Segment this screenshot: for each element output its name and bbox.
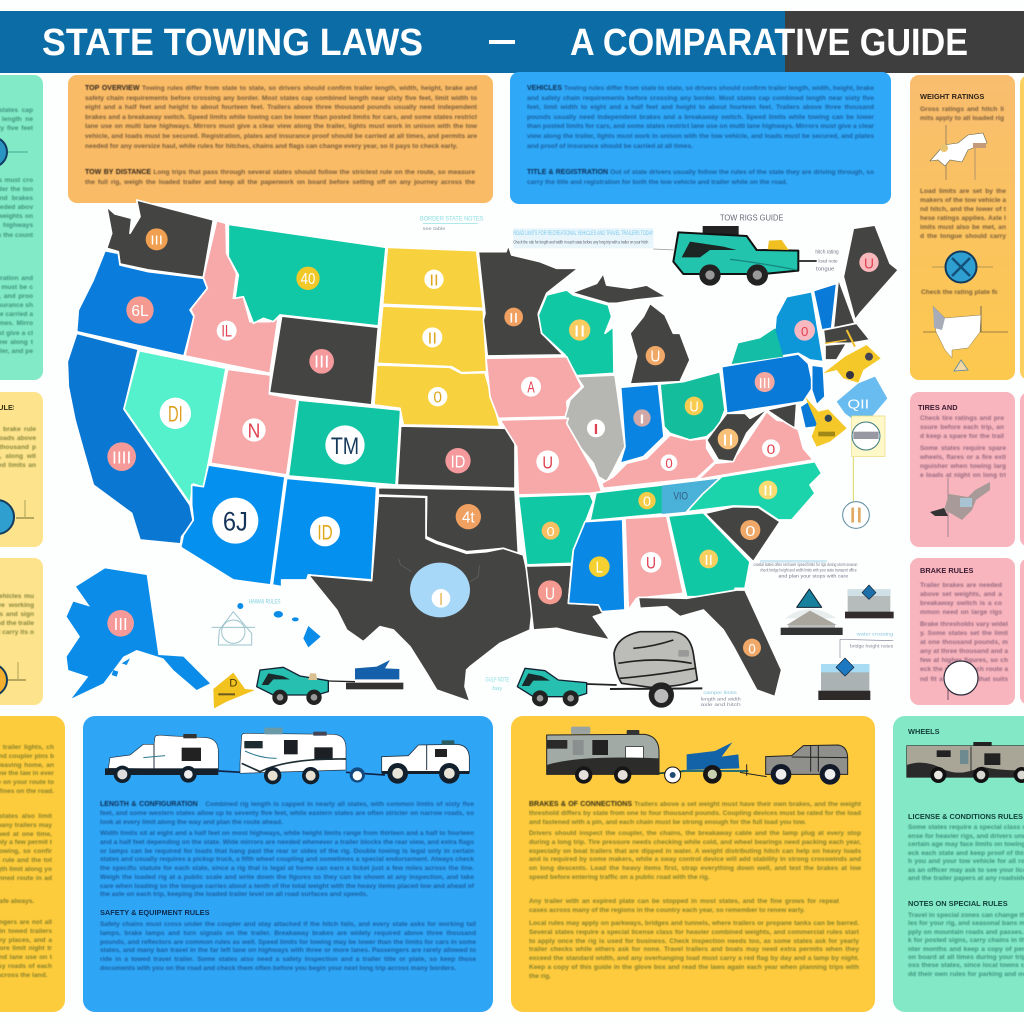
state: Utah <box>211 369 297 475</box>
state: Alabama: U <box>646 554 656 573</box>
state: Minnesota <box>478 245 578 356</box>
state: Connecticut <box>825 343 847 360</box>
state: Louisiana <box>526 565 610 640</box>
state: Virginia: 0 <box>767 441 776 457</box>
icon: white circle <box>943 660 979 700</box>
caption: camper note: axle and hitch <box>701 702 742 707</box>
icon: house badge <box>212 612 255 645</box>
title: STATE TOWING LAWS <box>42 22 423 64</box>
text block: overview: TOP OVERVIEW Towing rules differ from state to state, so drivers should confirm trailer length, width, height, brake and safety chain requirements before crossing any border. Most states cap combined length near sixty five feet, limit width to eight and a half feet and height to about fourteen feet. Trailers above three thousand pounds usually need independent brakes and a breakaway switch. Speed limits while towing can be lower than posted limits for cars, and some states restrict lane use on multi lane highways. Mirrors must give a clear view along the trailer, lights must work in unison with the tow vehicle, and loads must be secured. Registration, plates and insurance proof should be carried at all times, and permits are needed for any oversize haul, while rules for hitches, chains and flags can change every year, so it pays to check early. <box>85 85 477 150</box>
icon: white trailer hitch diagram <box>923 306 1008 372</box>
illustration: white truck camper, trailer and pickup <box>105 728 470 784</box>
state: Maryland and Delaware <box>767 400 818 428</box>
panel: bottom green <box>893 716 1024 1012</box>
icon: yellow callout signs upper <box>823 330 881 383</box>
state: Georgia: II <box>704 553 713 569</box>
state: Massachusetts <box>823 323 870 343</box>
illustration: teal RV top <box>673 226 817 286</box>
state: Indiana: I <box>639 411 645 426</box>
state: Hawaii <box>237 603 321 647</box>
icon: blue globe badge <box>932 250 993 284</box>
caption: camper note: length and width <box>701 697 741 702</box>
caption: west label: see table <box>423 226 446 231</box>
text block: blue second: TITLE & REGISTRATION Out of state drivers usually follow the rules of the state they are driving through, so carry the title and registration for both the tow vehicle and trailer while on the road. <box>527 169 874 186</box>
state: Oregon <box>77 251 207 356</box>
caption: Gulf label <box>485 678 509 692</box>
state: Iowa: A <box>527 380 535 397</box>
illustration: grey motorhome <box>906 742 1024 783</box>
state: Colorado <box>288 400 401 485</box>
text block: blue overview: VEHICLES Towing rules differ from state to state, so drivers should confirm trailer length, width, height, brake and safety chain requirements before crossing any border. Most states cap combined length near sixty five feet, limit width to eight and a half feet and height to about fourteen feet. Trailers above three thousand pounds usually need independent brakes and a breakaway switch. Speed limits while towing can be lower than posted limits for cars, and some states restrict lane use on multi lane highways. Mirrors must give a clear view along the trailer, lights must work in unison with the tow vehicle, and loads must be secured, and plates and proof of insurance should be carried at all times. <box>527 85 874 150</box>
state: North Dakota: II <box>429 272 439 289</box>
icon: yellow warning sign: D <box>229 678 237 690</box>
heading: WEIGHT RATINGS <box>920 92 984 101</box>
caption: RV left note: ROAD LIMITS FOR RECREATIONAL VEHICLES AND TRAVEL TRAILERS TODAY <box>513 230 654 237</box>
icon: highlighted seal with leader <box>843 416 885 528</box>
caption: drop note: bridge height notes <box>850 643 893 648</box>
icon: yellow callout signs lower <box>805 397 847 447</box>
panel: top blue overview <box>510 72 891 204</box>
state: Florida: 0 <box>748 640 756 656</box>
state: Washington: III <box>150 232 163 247</box>
text block: first section: LENGTH & CONFIGURATION Combined rig length is capped in nearly all states, with common limits of sixty five feet, and some western states allow up to seventy five feet, while eastern states are often stricter on narrow roads, so look at every limit along the way and plan the route ahead. <box>100 801 474 826</box>
state: Nevada <box>124 351 226 503</box>
state: South Carolina <box>705 507 780 562</box>
state: Wisconsin: II <box>574 323 586 340</box>
state: Wyoming <box>269 316 378 405</box>
state: Missouri: U <box>542 453 553 473</box>
heading: WHEELS <box>908 727 940 736</box>
state: Texas: I <box>439 589 443 609</box>
state: Alaska <box>67 568 210 698</box>
state: South Carolina: 0 <box>745 524 755 540</box>
state: Texas <box>308 496 533 702</box>
panel: right edge pink sliver lower <box>1020 558 1024 705</box>
state: Kentucky <box>602 435 715 488</box>
panel: bottom blue <box>83 716 493 1012</box>
icon: highlighted seal with leader: ll <box>849 506 863 528</box>
icon: blue gauge with stand <box>0 499 34 535</box>
caption: southeast note: check bridge height and width limits with your state transport office <box>760 568 857 573</box>
state: Oregon: 6L <box>131 303 149 320</box>
icon: water drop building <box>818 639 893 700</box>
caption: RV right note <box>815 249 839 273</box>
state: Arkansas <box>518 494 593 565</box>
state: Ohio <box>660 372 725 440</box>
state: Missouri <box>500 418 602 495</box>
state: Kentucky: 0 <box>665 455 673 471</box>
icon: light blue diamond: QII <box>847 397 869 411</box>
caption: camper note <box>701 690 742 707</box>
illustration: teal car with blue trailer <box>257 660 403 705</box>
heading: NOTES ON SPECIAL RULES <box>908 899 1008 908</box>
state: California: IIII <box>112 447 131 467</box>
state: West Virginia <box>707 408 768 462</box>
caption: RV right note: tongue <box>816 267 834 273</box>
map: western states <box>67 200 533 708</box>
panel: top orange overview <box>68 75 493 203</box>
state: Michigan upper <box>572 273 667 303</box>
state: Mississippi: L <box>596 560 603 577</box>
header banner <box>0 11 1024 73</box>
state: Nebraska: 0 <box>433 390 442 407</box>
state: New York <box>732 292 823 364</box>
panel: right pink upper <box>910 392 1015 547</box>
state: Wisconsin <box>538 290 614 376</box>
state: West Virginia: II <box>722 432 734 449</box>
text block: third paragraph: Any trailer with an expired plate can be stopped in most states, and the fine grows for repeat cases across many of the regions in the country each year, so remember to renew early. <box>529 898 839 914</box>
caption: RV right note: hitch rating <box>815 249 839 255</box>
caption: southeast note: coastal states often set lower speed limits for rigs during storm season <box>753 562 858 567</box>
icon: yellow warning sign <box>213 673 255 708</box>
text block: second paragraph: Width limits sit at eight and a half feet on most highways, while height limits range from thirteen and a half to fourteen and a half feet depending on the state. Wide mirrors are needed whenever a trailer blocks the rear view, and extra flags or lamps can be required for loads that hang past the rear or sides of the rig. Double towing is legal only in certain states and usually requires a pickup truck, a fifth wheel coupling and sometimes a special endorsement. Always check the specific statute for each state, since a rig that is legal at home can earn a ticket just a few miles across the line. Weigh the loaded rig at a public scale and write down the figures so they can be shown at any inspection, and take care when loading so the tongue carries about a tenth of the total weight with the heavy items placed low and ahead of the axle on each trip, keeping the loaded trailer level on all road surfaces and speeds. <box>100 830 474 898</box>
caption: west label <box>420 216 483 231</box>
text block: third paragraph: Safety chains must cross under the coupler and stay attached if the hitch fails, and every state asks for working tail lamps, brake lamps and turn signals on the trailer. Breakaway brakes are widely required above three thousand pounds, and reflectors are common rules as well. Speed limits for towing may be lower than the limits for cars in some states, and many ban travel in the far left lane on highways with three or more lanes. Passengers are rarely allowed to ride in a towed travel trailer. Some states also need a safety inspection and a trailer title or plate, so keep those documents with you on the road and check them often before you begin your next long trip across many borders. <box>100 921 476 972</box>
state: North Dakota <box>383 247 483 308</box>
caption: RV right note: load note <box>818 259 838 264</box>
state: Ohio: U <box>689 400 699 416</box>
panel: right edge pink sliver upper <box>1020 392 1024 547</box>
caption: camper note: camper limits <box>703 690 737 696</box>
state: Georgia <box>668 513 750 597</box>
illustration: teal car towing grey camper <box>517 632 702 708</box>
state: Oklahoma: 4t <box>462 510 475 527</box>
title: A COMPARATIVE GUIDE <box>570 22 968 64</box>
heading: LICENSE & CONDITIONS RULES <box>908 812 1023 821</box>
text block: first section: BRAKES & OF CONNECTIONS Trailers above a set weight must have their own brakes, and the weight threshold differs by state from one to four thousand pounds. Coupling devices must be rated for the load and fastened with a pin, and each chain must be strong enough for the full load you tow. <box>529 801 861 826</box>
state: Minnesota: II <box>509 310 518 326</box>
state: Kansas: ID <box>451 451 465 471</box>
panel: right orange <box>910 75 1015 380</box>
map: eastern states <box>478 213 898 708</box>
state: New Mexico: ID <box>317 520 333 544</box>
state: Illinois: I <box>593 422 599 438</box>
caption: drop note <box>850 631 894 648</box>
state: Virginia <box>698 412 813 479</box>
icon: orange gauge with stand <box>0 662 26 694</box>
state: Montana <box>228 224 386 326</box>
state: Tennessee: 0 <box>643 493 651 509</box>
state: Tennessee: VIO <box>673 490 688 502</box>
state: Utah: N <box>248 420 260 442</box>
state: South Dakota: II <box>428 330 437 347</box>
panel: right pink lower <box>910 558 1015 705</box>
heading: second section: SAFETY & EQUIPMENT RULES <box>100 908 210 917</box>
caption: southeast note <box>753 560 858 579</box>
header dark end block <box>785 11 1024 73</box>
panel: right edge orange sliver <box>1020 75 1024 380</box>
state: Arizona <box>181 465 285 585</box>
state: North Carolina: II <box>763 484 773 500</box>
state: Michigan lower: U <box>650 349 660 366</box>
state: Michigan lower <box>630 303 690 384</box>
state: Pennsylvania: III <box>759 376 771 392</box>
state: Maine: U <box>864 256 874 272</box>
state: Illinois <box>563 375 625 482</box>
caption: drop note: water crossing <box>857 631 894 637</box>
state: Arkansas: 0 <box>547 524 555 539</box>
state: Oklahoma <box>378 488 518 553</box>
state: New Jersey <box>812 365 825 405</box>
caption: RV title: TOW RIGS GUIDE <box>720 213 784 223</box>
caption: Gulf label: GULF NOTE <box>485 678 509 684</box>
state: Idaho <box>185 221 278 373</box>
state: Tennessee <box>590 478 722 521</box>
state: New Hampshire <box>833 278 855 328</box>
icon: white state map with cross lines <box>929 125 988 180</box>
state: Arizona: 6J <box>223 507 248 537</box>
caption: RV left note: Check the rule for length and width in each state before any long trip with a trailer on your hitch <box>513 239 649 244</box>
state: California <box>67 333 193 544</box>
illustration: grey trailer, blue boat and grey truck <box>546 726 848 785</box>
state: South Dakota <box>377 306 487 373</box>
icon: light blue diamond <box>837 377 887 427</box>
panel: left yellow lower <box>0 558 43 705</box>
text block: fourth paragraph: Local rules may apply on parkways, bridges and tunnels, where trailers or propane tanks can be barred. Several states require a special license class for heavier combined weights, and commercial rules start to apply once the rig is used for business. Check inspection needs too, as some states ask for yearly trailer checks while others ask for none. Travel trailers and boats may need extra permits when they exceed the standard width, and any overhanging load must carry a red flag by day and a lamp by night. Keep a copy of this guide in the glove box and read the laws again each year when planning trips with the rig. <box>529 920 859 980</box>
panel: bottom left yellow <box>0 716 65 1012</box>
caption: RV left note <box>513 228 675 250</box>
state: Alaska: III <box>114 614 128 634</box>
panel: left green rules <box>0 75 43 380</box>
state: Alabama <box>625 516 683 610</box>
state: Iowa <box>486 357 582 418</box>
icon: grey state shape <box>930 478 990 537</box>
state: Washington <box>107 200 213 277</box>
panel: left yellow upper <box>0 392 43 547</box>
panel: bottom yellow <box>511 716 875 1012</box>
state: Kansas <box>397 426 515 488</box>
caption: Gulf label: bay <box>492 686 503 692</box>
state: Indiana <box>620 384 664 463</box>
state: Florida <box>638 590 782 697</box>
state: Mississippi <box>568 519 625 612</box>
caption: Hawaii label: HAWAII RULES <box>249 598 281 605</box>
icon: small building with drop <box>845 585 894 618</box>
state: Louisiana: U <box>545 583 555 603</box>
heading: TIRES AND <box>918 403 958 412</box>
icon: blue globe with leader <box>0 138 28 166</box>
text block: second paragraph: Drivers should inspect the coupler, the chains, the breakaway cable and the lamp plug at every stop during a long trip. Tire pressure needs checking while cold, and wheel bearings need packing each year, especially on boat trailers that are dipped in water. A weight distributing hitch can help on heavy loads and is required by some makers, while a sway control device will add stability in strong crosswinds and on long descents. Load the heavy items first, strap everything down well, and test the brakes at low speed before entering traffic on a public road with the rig. <box>529 830 861 881</box>
state: Maine <box>843 225 898 320</box>
caption: west label: BORDER STATE NOTES <box>420 216 483 223</box>
state: Idaho: IL <box>221 322 232 341</box>
state: Nevada: DI <box>168 402 183 427</box>
title <box>42 22 968 64</box>
state: Nebraska <box>374 365 500 427</box>
state: Montana: 40 <box>301 271 315 288</box>
state: New York: 0 <box>801 324 808 339</box>
state: New Mexico <box>272 478 377 587</box>
state: Wyoming: III <box>314 352 329 372</box>
state: Colorado: TM <box>331 433 359 460</box>
state: North Carolina <box>687 462 822 520</box>
icon: building with triangle <box>781 589 843 635</box>
caption: southeast note: and plan your stops with care <box>778 574 849 579</box>
state: Pennsylvania <box>722 354 813 413</box>
heading: BRAKE RULES <box>920 566 973 575</box>
state: Vermont <box>813 283 837 330</box>
